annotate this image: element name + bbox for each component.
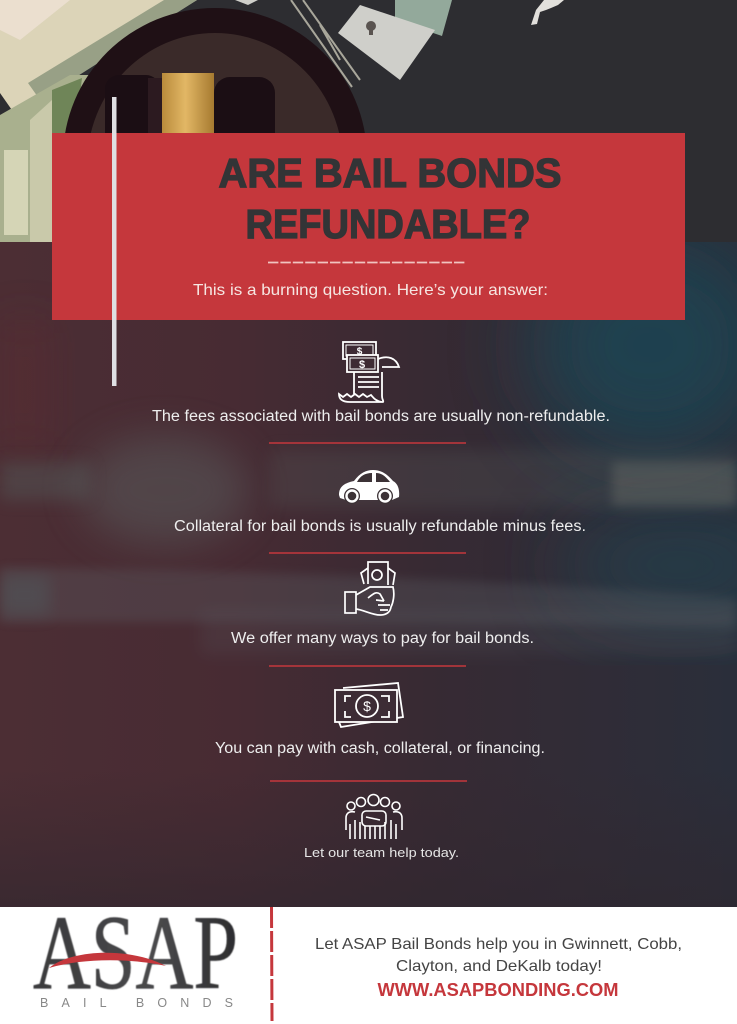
icon: team [346, 794, 402, 839]
icon: hand holding cash [345, 562, 395, 615]
gavel [105, 73, 275, 133]
text: collateral: Collateral for bail bonds is usually refundable minus fees. [174, 518, 586, 535]
icon: bills and receipt [339, 342, 399, 402]
subtitle: This is a burning question. Here’s your answer: [193, 282, 548, 299]
footer text: Clayton, and DeKalb today! [396, 958, 602, 975]
icon: bills and receipt: $ [359, 359, 365, 371]
sound block [65, 8, 365, 133]
text: pay: We offer many ways to pay for bail bonds. [231, 630, 534, 647]
vertical accent bar [112, 97, 116, 386]
handcuff and bill [235, 0, 452, 87]
text: fees: The fees associated with bail bonds are usually non-refundable. [152, 408, 610, 425]
icon: car [339, 470, 399, 504]
icon: bills and receipt: $ [357, 346, 363, 358]
key [531, 0, 564, 25]
icon: banknote: $ [363, 698, 371, 714]
logo: ASAP [33, 894, 238, 1011]
photo: gavel, cash and handcuffs on slate [0, 0, 737, 242]
blurred street background [0, 235, 737, 907]
footer [0, 894, 737, 1024]
footer text: Let ASAP Bail Bonds help you in Gwinnett, Cobb, [315, 936, 682, 953]
cash bills [0, 0, 197, 242]
red title panel [52, 133, 685, 320]
website: WWW.ASAPBONDING.COM [378, 980, 618, 1000]
text: team: Let our team help today. [304, 845, 459, 860]
dashed divider [270, 907, 274, 1021]
title [218, 150, 562, 247]
title: ARE BAIL BONDS [218, 150, 562, 196]
logo: BAIL BONDS [40, 996, 233, 1010]
footer text [315, 936, 682, 1000]
text: cash: You can pay with cash, collateral, or financing. [215, 740, 545, 757]
title: REFUNDABLE? [246, 201, 530, 247]
icon: banknote [335, 683, 403, 727]
